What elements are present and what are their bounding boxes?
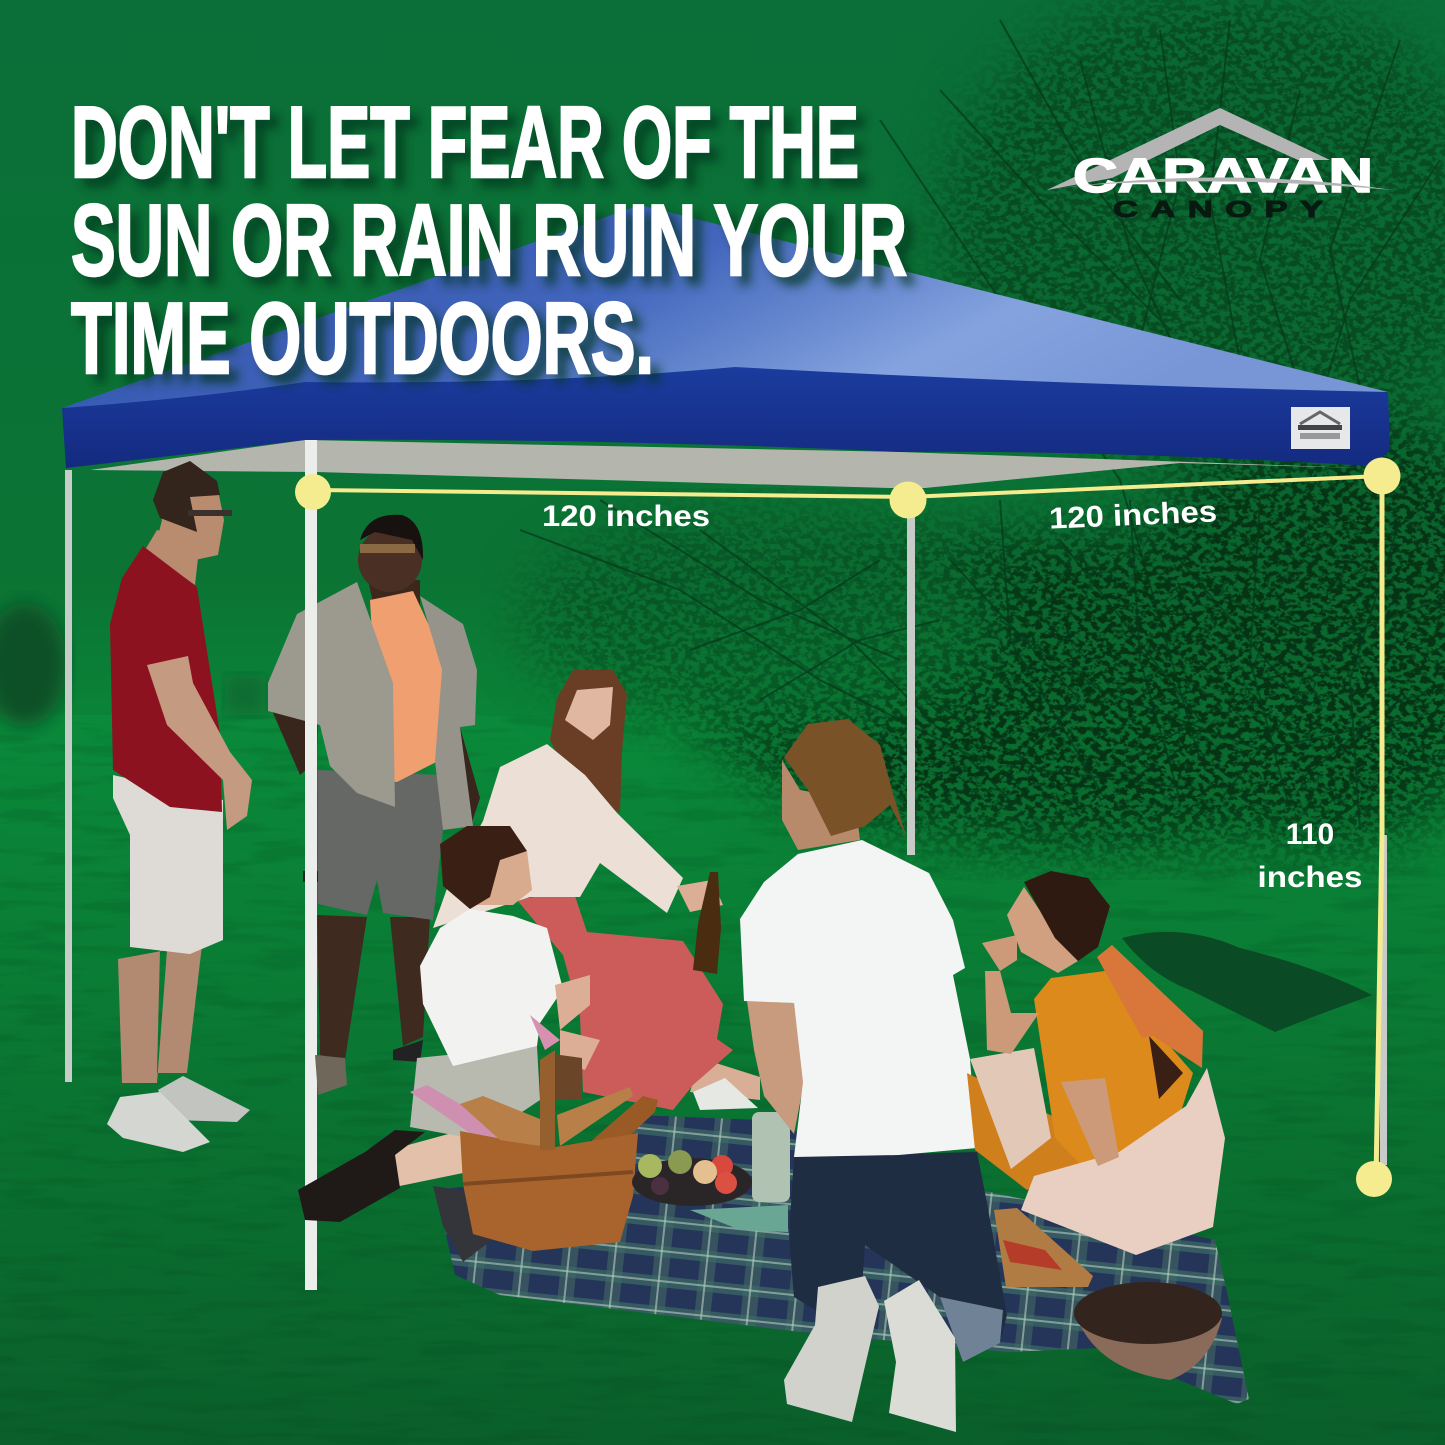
head — [155, 490, 224, 575]
head — [782, 760, 860, 850]
skirt — [410, 1046, 540, 1140]
skirt — [517, 890, 733, 1110]
hair — [1024, 871, 1110, 961]
fruit plate — [632, 1150, 752, 1206]
canopy underside — [90, 440, 1362, 488]
glass jar — [752, 1112, 790, 1202]
canopy valance — [62, 367, 1390, 468]
dimension lines — [295, 458, 1400, 1197]
leg and boot — [390, 1130, 463, 1188]
dimension marker — [1356, 1161, 1392, 1197]
forearms — [270, 700, 480, 828]
legs — [118, 945, 202, 1083]
tray — [410, 1085, 533, 1146]
scarf — [1097, 945, 1203, 1068]
beer bottle — [693, 872, 721, 974]
polo shirt — [110, 546, 222, 812]
tree foliage — [480, 0, 1445, 880]
dark jacket on ground — [1122, 932, 1372, 1032]
canopy legs — [65, 440, 1387, 1290]
label: 120 inches left: 120 inches — [542, 500, 710, 533]
label: 120 inches right: 120 inches — [1048, 495, 1218, 536]
lower orange — [967, 1073, 1082, 1190]
t-shirt — [740, 840, 977, 1157]
logo: Caravan Canopy — [1047, 108, 1393, 222]
shirt — [420, 909, 563, 1066]
legs — [317, 915, 430, 1060]
title: DON'T LET FEAR OF THE — [71, 87, 859, 199]
face — [565, 687, 613, 740]
shirt — [1034, 971, 1193, 1166]
arm — [147, 656, 252, 830]
food tray — [994, 1208, 1093, 1287]
label: 110 inches: 110 — [1286, 818, 1334, 851]
picnic blanket — [436, 1115, 1249, 1404]
title — [71, 87, 907, 395]
leg and sneaker — [690, 1058, 760, 1100]
dimension marker — [295, 474, 331, 510]
man in red shirt — [107, 461, 252, 1152]
hair — [440, 826, 527, 909]
man in grey shirt — [268, 515, 480, 1095]
man in white t-shirt — [740, 719, 1007, 1432]
ponytail — [1149, 1036, 1183, 1099]
hand — [982, 935, 1017, 971]
blanket left — [970, 1048, 1051, 1169]
shoes — [158, 1076, 250, 1122]
canopy roof — [62, 205, 1388, 408]
jeans — [789, 1152, 1007, 1362]
wooden bowl — [1074, 1282, 1222, 1380]
woman in pink skirt — [433, 670, 760, 1110]
picnic basket — [460, 1050, 658, 1251]
napkin — [690, 1205, 788, 1232]
title: TIME OUTDOORS. — [71, 283, 654, 395]
label: 110 inches — [1258, 818, 1362, 894]
overshirt — [268, 582, 395, 807]
shorts — [318, 770, 443, 920]
arm — [985, 971, 1119, 1166]
face — [1007, 887, 1078, 973]
neck — [145, 530, 200, 585]
woman in white shirt — [298, 826, 600, 1222]
dreadlocks — [784, 719, 906, 836]
shorts — [113, 775, 223, 954]
pole in front — [305, 600, 317, 940]
dark bag — [433, 1186, 505, 1262]
head — [358, 528, 422, 592]
canopy tag — [1291, 407, 1350, 449]
logo: Caravan Canopy: CANOPY — [1113, 197, 1324, 222]
dimension marker — [890, 482, 926, 518]
title: SUN OR RAIN RUIN YOUR — [71, 185, 907, 297]
t-shirt — [370, 591, 445, 782]
sweater — [433, 744, 683, 928]
dimension marker — [1364, 458, 1400, 494]
arm — [747, 1001, 804, 1134]
hand — [677, 880, 723, 912]
logo: Caravan Canopy: CARAVAN — [1073, 150, 1373, 203]
face — [470, 851, 532, 905]
label: 110 inches: inches — [1258, 861, 1362, 894]
blanket right — [1021, 1068, 1225, 1255]
hands — [555, 975, 600, 1070]
hair back — [550, 670, 627, 813]
shoes — [784, 1276, 879, 1422]
woman in orange shirt — [967, 871, 1225, 1255]
neck — [368, 580, 420, 612]
canopy — [62, 205, 1390, 1290]
